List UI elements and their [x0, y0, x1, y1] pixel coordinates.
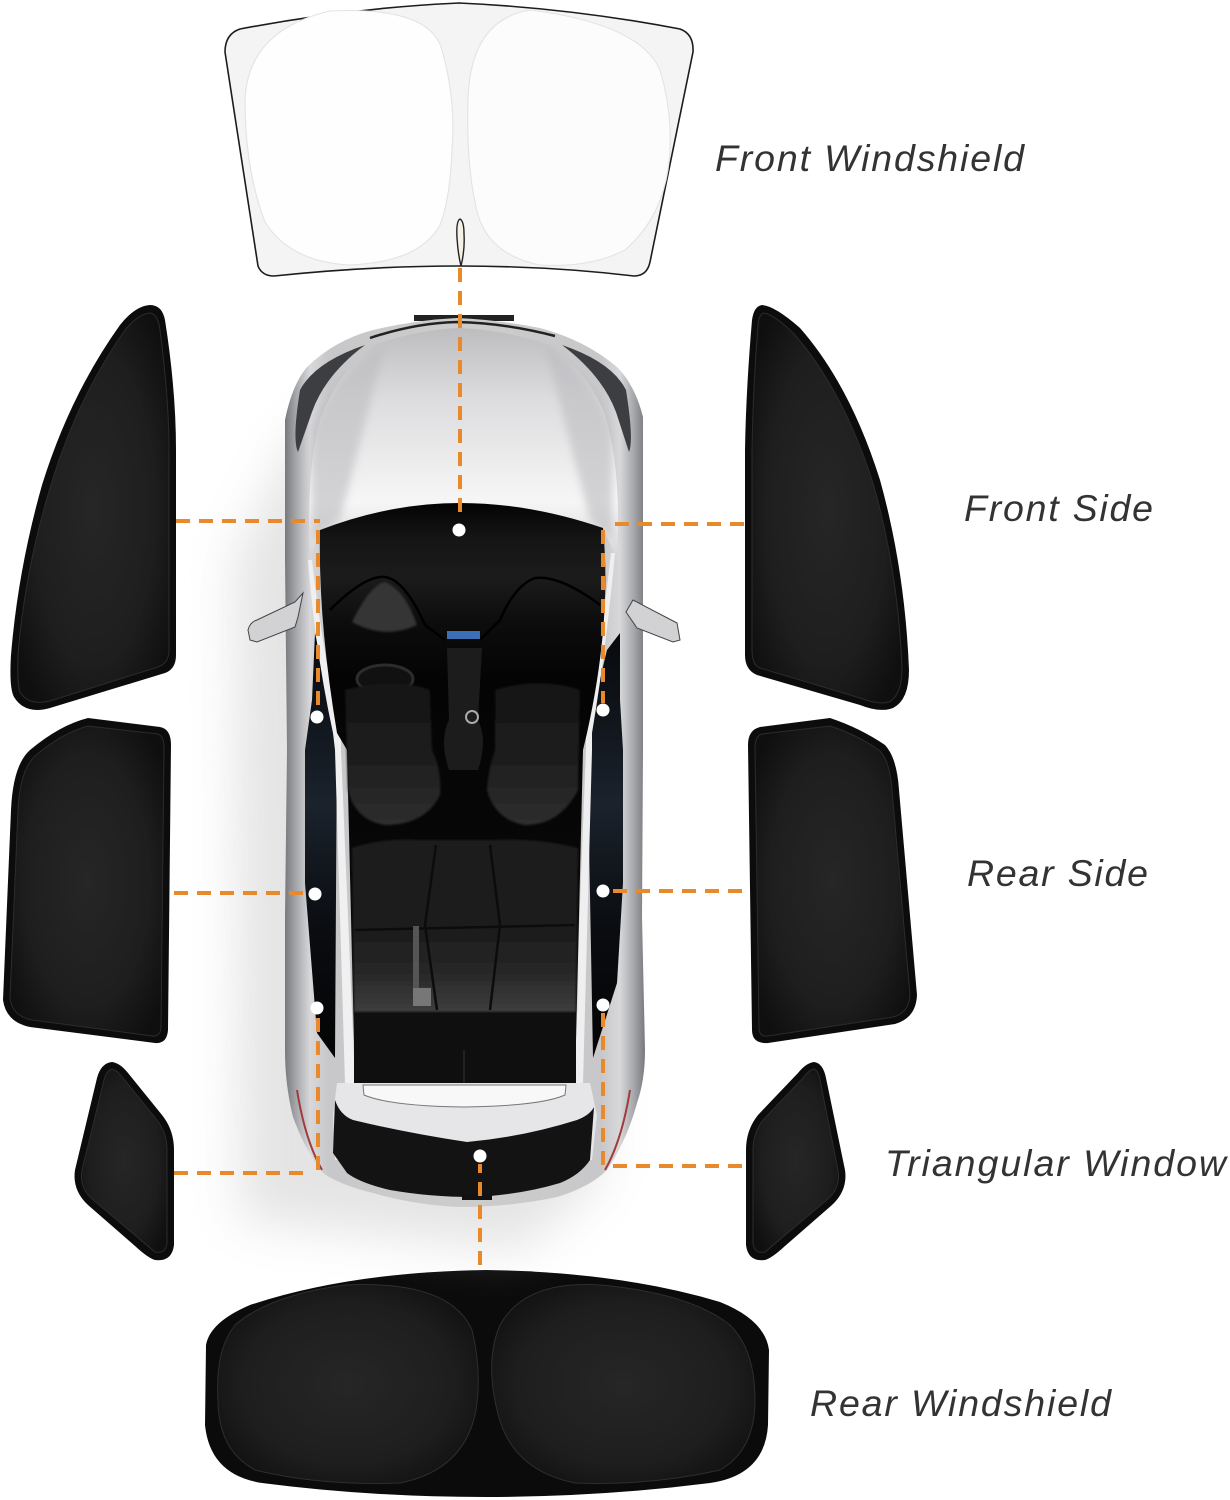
right headlight [562, 345, 631, 452]
hood crease highlights [312, 345, 612, 540]
orange dashed leader lines [174, 268, 744, 1265]
left triangular sunshade [75, 1062, 174, 1260]
blue screen [447, 631, 480, 639]
tailgate panel [363, 1085, 566, 1107]
line: front windshield [458, 268, 462, 516]
rear seat dividers and belts [355, 845, 575, 1010]
line: left triangular [174, 1016, 318, 1173]
hood front edge [370, 322, 555, 338]
label: Front Side: Front Side [964, 487, 1153, 529]
rear bench seat [352, 840, 578, 1012]
line: right rear side [610, 889, 742, 893]
car shadow [235, 430, 600, 1250]
rear windshield sunshade [205, 1270, 769, 1497]
left front side sunshade [10, 305, 176, 710]
label: Rear Windshield: Rear Windshield [810, 1382, 1112, 1424]
left side window [305, 633, 337, 1058]
right front seat [487, 683, 580, 825]
cargo area [354, 1013, 576, 1083]
steering wheel [357, 665, 413, 693]
left rear side sunshade [3, 718, 171, 1043]
car top view [235, 315, 680, 1250]
left mirror [248, 593, 303, 642]
right pillar rail [573, 553, 615, 1083]
label: Triangular Window: Triangular Window [885, 1142, 1229, 1184]
tailgate [333, 1083, 597, 1160]
hood [309, 328, 618, 560]
line: right front side [603, 524, 744, 703]
tail lights [297, 1090, 322, 1170]
rear window [333, 1100, 594, 1197]
right mirror [626, 600, 680, 642]
line: right triangular [603, 1012, 742, 1166]
label: Front Windshield: Front Windshield [715, 137, 1025, 179]
rear bumper tab [462, 1194, 492, 1200]
right triangular sunshade [746, 1062, 845, 1260]
left front seat [345, 683, 440, 825]
left headlight [295, 345, 365, 452]
line: left front side [176, 521, 320, 708]
label: Rear Side: Rear Side [967, 852, 1148, 894]
right rear side sunshade [748, 718, 917, 1043]
right side window [587, 633, 623, 1058]
dashboard curves [330, 577, 600, 640]
car body [285, 318, 645, 1207]
front wiper bar [414, 315, 514, 321]
strap loop [457, 219, 464, 266]
instrument hood [352, 582, 417, 632]
centre console [444, 648, 483, 770]
right front side sunshade [745, 305, 909, 710]
line: left rear side [174, 891, 310, 895]
left pillar rail [308, 560, 355, 1083]
cabin interior [320, 503, 605, 1083]
white marker dots [308, 524, 610, 1162]
front windshield sunshade [225, 3, 693, 276]
line: rear windshield [478, 1164, 482, 1265]
